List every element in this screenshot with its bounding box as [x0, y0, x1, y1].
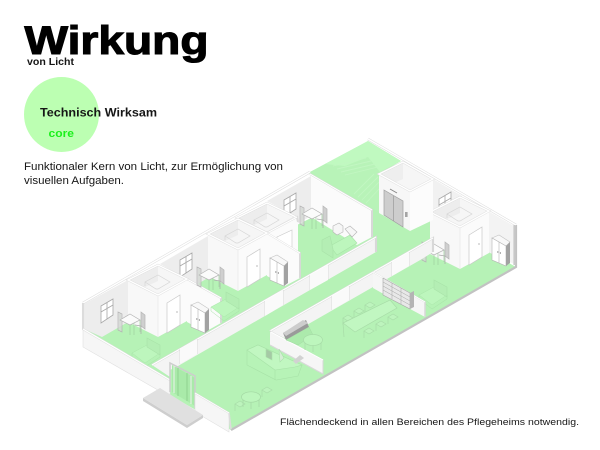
entrance door	[170, 363, 195, 408]
back wall: room 3	[267, 176, 311, 224]
title: Wirkung	[24, 19, 208, 63]
lobby table with chairs	[235, 387, 272, 411]
description text: Funktionaler Kern von Licht, zur Ermöglichung von	[24, 161, 283, 173]
wardrobe right room	[492, 235, 510, 266]
back wall: right end	[488, 211, 514, 264]
desk and chairs room 1	[118, 312, 145, 335]
back walls: room 1	[84, 280, 128, 337]
description text	[24, 161, 283, 187]
elevator doors	[384, 189, 408, 227]
wall: room 1 side	[187, 279, 221, 332]
bathroom box 3	[237, 203, 296, 275]
low wall: room 1 front	[83, 329, 170, 397]
low wall: lobby front	[195, 393, 229, 432]
desk and chairs right room	[422, 242, 449, 265]
wall: room 2 side	[267, 233, 300, 286]
back wall: room 2	[160, 236, 208, 290]
elevator box	[379, 162, 433, 231]
low wall: day room left	[270, 331, 323, 374]
outer back rim right	[368, 139, 516, 225]
box 3 right face	[267, 217, 298, 262]
round table	[304, 334, 322, 352]
pillow room 3	[345, 226, 357, 237]
wardrobe room 1	[191, 302, 209, 333]
bed room 2	[211, 292, 239, 321]
low wall: corridor lower	[270, 238, 433, 338]
shelf	[383, 278, 414, 309]
wall: room 3 right side	[311, 177, 372, 245]
slab edge	[231, 225, 516, 430]
isometric floor plan	[83, 139, 516, 432]
box 3 door	[277, 230, 292, 248]
reception desk	[247, 345, 304, 380]
subtitle: von Licht	[27, 57, 75, 68]
side wall strip	[513, 225, 516, 265]
outer back rim left	[83, 172, 310, 303]
night stand room 3	[333, 223, 343, 235]
desk and chairs room 3	[300, 206, 327, 229]
back wall: right of elevator	[433, 179, 462, 222]
bed right room	[419, 280, 447, 309]
gray counter	[283, 320, 313, 345]
bathroom box 2	[208, 219, 267, 291]
bathroom box 1	[128, 265, 187, 337]
low wall: day room right	[373, 272, 425, 317]
bed room 1	[132, 338, 160, 367]
desk and chairs room 2	[197, 267, 224, 290]
category tag: core: core	[48, 128, 74, 140]
bathroom box right room	[430, 197, 489, 269]
category circle	[24, 77, 99, 152]
description text: visuellen Aufgaben.	[24, 175, 124, 187]
entrance step	[143, 388, 203, 428]
icon: window right room	[439, 192, 451, 216]
footer note: Flächendeckend in allen Bereichen des Pflegeheims notwendig.	[280, 417, 579, 428]
low wall: corridor upper	[152, 237, 376, 377]
icon: window room 3	[284, 193, 296, 217]
category heading: Technisch Wirksam	[40, 108, 157, 120]
bed room 3	[322, 235, 357, 258]
wardrobe room 2	[270, 255, 288, 286]
stairwell	[308, 141, 401, 212]
floor	[85, 185, 516, 430]
icon: window room 1	[101, 299, 113, 323]
dining table with chairs	[343, 300, 398, 338]
icon: window room 2	[180, 253, 192, 277]
